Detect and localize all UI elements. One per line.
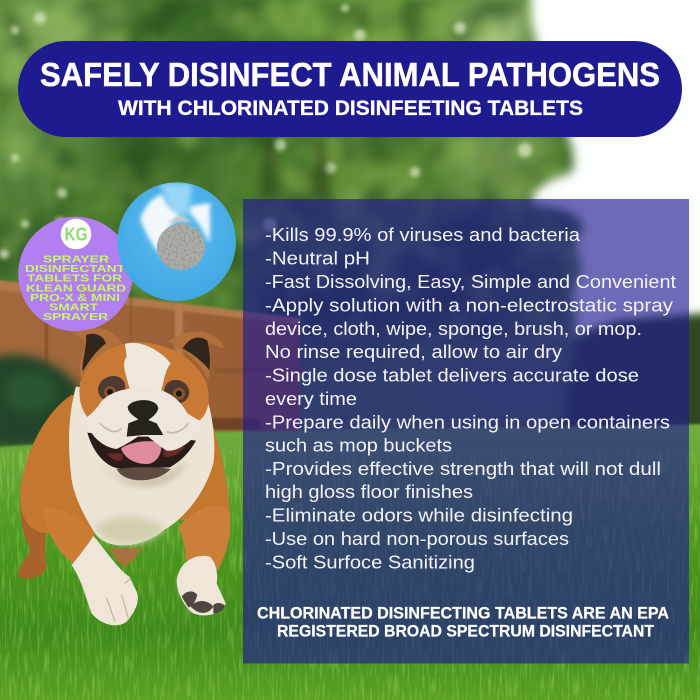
benefits list bbox=[265, 225, 676, 573]
benefits list: -Prepare daily when using in open containers bbox=[265, 413, 670, 433]
benefits list: -Neutral pH bbox=[265, 248, 370, 268]
chin bbox=[117, 467, 171, 480]
badge text: SPRAYER bbox=[43, 312, 109, 323]
panel: product benefits bbox=[243, 199, 689, 664]
benefits list: high gloss floor finishes bbox=[265, 482, 473, 502]
badge text: SPRAYER bbox=[43, 255, 110, 266]
benefits list: every time bbox=[265, 389, 357, 409]
heading: SAFELY DISINFECT ANIMAL PATHOGENS bbox=[40, 56, 660, 93]
EPA statement bbox=[257, 605, 669, 641]
distant trees bbox=[560, 314, 700, 440]
badge text: DISINFECTANT bbox=[25, 264, 125, 275]
icon: dissolving tablet bbox=[117, 182, 236, 301]
blaze bbox=[124, 343, 171, 392]
hind leg bbox=[18, 487, 47, 579]
left front leg bbox=[43, 507, 95, 564]
EPA statement: CHLORINATED DISINFECTING TABLETS ARE AN EPA bbox=[257, 605, 669, 623]
badge text: KLEAN GUARD bbox=[26, 283, 126, 294]
chest bbox=[69, 387, 214, 545]
bulldog bbox=[18, 328, 230, 625]
badge text: TABLETS FOR bbox=[27, 274, 123, 285]
badge text: SMART bbox=[49, 303, 98, 314]
EPA statement: REGISTERED BROAD SPECTRUM DISINFECTANT bbox=[277, 623, 654, 641]
benefits list: -Fast Dissolving, Easy, Simple and Convenient bbox=[265, 272, 676, 292]
tongue bbox=[121, 441, 161, 464]
benefits list: -Apply solution with a non-electrostatic spray bbox=[265, 295, 673, 315]
badge text: PRO-X & MINI bbox=[30, 293, 120, 304]
nose bbox=[127, 400, 163, 437]
tree trunk bbox=[258, 138, 332, 200]
bush bbox=[0, 355, 79, 447]
subheading: WITH CHLORINATED DISINFEETING TABLETS bbox=[118, 97, 583, 120]
ears bbox=[71, 328, 123, 381]
lawn bbox=[0, 424, 700, 700]
benefits list: No rinse required, allow to air dry bbox=[265, 342, 562, 362]
benefits list: -Single dose tablet delivers accurate dose bbox=[265, 366, 639, 386]
benefits list: -Soft Surfoce Sanitizing bbox=[265, 553, 475, 573]
benefits list: -Kills 99.9% of viruses and bacteria bbox=[265, 225, 581, 245]
mouth bbox=[87, 433, 196, 469]
wooden fence bbox=[0, 279, 305, 432]
sky bbox=[531, 0, 700, 335]
benefits list: device, cloth, wipe, sponge, brush, or mop. bbox=[265, 319, 642, 339]
benefits list: such as mop buckets bbox=[265, 436, 452, 456]
badge: sprayer tablets bbox=[18, 217, 133, 331]
title banner bbox=[18, 41, 682, 137]
icon: KG logo: KG bbox=[64, 224, 88, 244]
benefits list: -Use on hard non-porous surfaces bbox=[265, 529, 569, 549]
head bbox=[79, 342, 209, 422]
benefits list: -Eliminate odors while disinfecting bbox=[265, 506, 573, 526]
eyes bbox=[94, 372, 129, 405]
muzzle bbox=[80, 388, 204, 451]
right front leg bbox=[178, 505, 230, 570]
benefits list: -Provides effective strength that will not dull bbox=[265, 459, 661, 479]
body bbox=[20, 395, 230, 533]
badge text bbox=[25, 255, 126, 323]
